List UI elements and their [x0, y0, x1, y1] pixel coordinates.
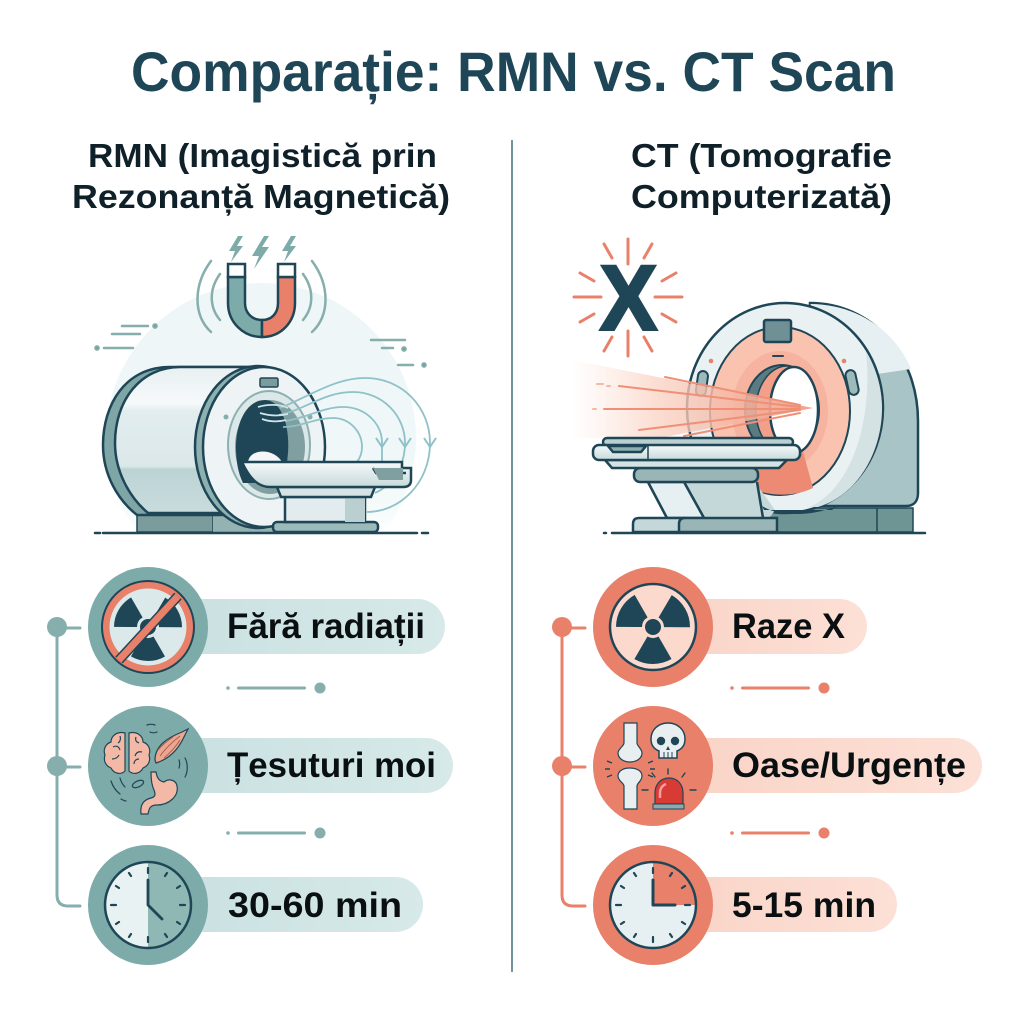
connector: RMN timeline: [47, 617, 80, 906]
table base: [633, 518, 777, 532]
ground line: [95, 532, 428, 534]
connector: CT timeline: [552, 617, 585, 906]
item: 30-60 min: [88, 845, 423, 965]
side grips: [695, 370, 709, 397]
label: 30-60 min: [228, 886, 402, 925]
icon: clock 30-60 min: [105, 862, 191, 948]
label: 5-15 min: [732, 886, 876, 925]
magnetic waves: [198, 261, 326, 332]
icon: X-ray symbol: [574, 239, 682, 356]
item: Raze X: [593, 567, 867, 687]
illustration: MRI scanner with magnet: [95, 236, 436, 593]
patient table: [593, 438, 800, 520]
scanner housing: [800, 303, 918, 506]
icon: stomach: [141, 772, 177, 814]
icon: lightning bolts: [229, 236, 296, 269]
separator: [730, 682, 830, 694]
heading: CT: CT (Tomografie: [631, 137, 892, 174]
icon: skull: [651, 723, 685, 758]
item: 5-15 min: [593, 845, 897, 965]
bore opening: [235, 400, 305, 494]
heading: RMN: [72, 137, 450, 216]
ground line: [604, 532, 925, 534]
decorative tissue marks: [111, 724, 187, 801]
patient head pad: [248, 452, 282, 462]
scanner base: [137, 508, 213, 532]
magnetic field arcs: [258, 378, 436, 512]
heading: CT: Computerizată): [631, 178, 892, 215]
separator: [730, 828, 830, 838]
icon: broken bone: [605, 723, 655, 809]
control window: [260, 378, 278, 387]
label: Raze X: [732, 607, 846, 646]
scanner front ring: [687, 303, 883, 513]
scanner base: [770, 508, 913, 532]
separator: [226, 682, 326, 694]
icon: emergency siren: [642, 769, 696, 809]
panel: CT column: [552, 137, 982, 965]
heading: RMN: Rezonanță Magnetică): [72, 178, 450, 216]
item: Țesuturi moi: [88, 706, 453, 826]
title: Comparație: RMN vs. CT Scan: [131, 40, 896, 104]
illustration: CT scanner with X-ray beam: [572, 239, 925, 533]
separator: [226, 828, 326, 838]
icon: horseshoe magnet: [228, 264, 295, 337]
coral ring: [710, 327, 850, 495]
icon: radiation: [610, 584, 696, 670]
heading: CT: [631, 137, 892, 215]
item: Fără radiații: [88, 567, 445, 687]
icon: X-ray symbol: X: [600, 248, 657, 350]
icon: brain: [104, 733, 150, 773]
X-ray beam: [572, 360, 813, 438]
icon: no radiation: [102, 581, 194, 673]
label: Fără radiații: [227, 607, 425, 646]
icon: muscle: [155, 729, 188, 763]
heading: RMN: RMN (Imagistică prin: [88, 137, 437, 174]
panel: RMN column: [47, 137, 453, 965]
item: Oase/Urgențe: [593, 706, 982, 826]
scanner body: [103, 367, 257, 515]
bore opening: [745, 365, 819, 455]
scanner front ring: [195, 366, 321, 528]
icon: clock 5-15 min: [610, 862, 696, 948]
label: Țesuturi moi: [227, 746, 436, 785]
label: Oase/Urgențe: [732, 746, 966, 785]
control window: [764, 320, 791, 342]
motion lines: [95, 324, 426, 367]
patient table: [242, 462, 411, 532]
divider between columns: [511, 140, 513, 972]
